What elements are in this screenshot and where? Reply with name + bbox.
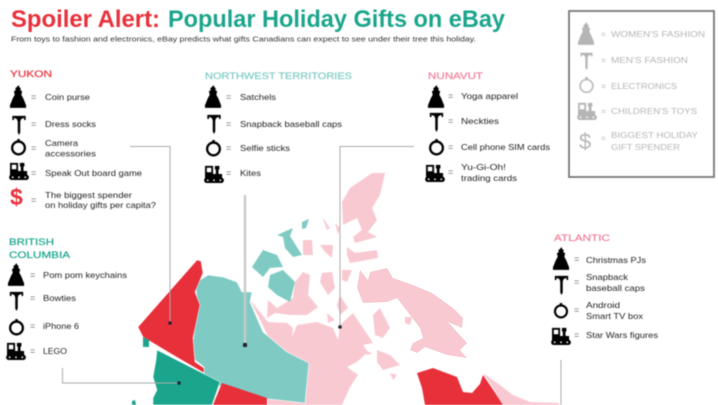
row: men's fashion: Dress socks — [45, 120, 96, 129]
region: Northwest Territories — [193, 219, 309, 403]
legend — [569, 11, 714, 177]
row: biggest spender: = — [31, 195, 36, 205]
row: electronics: = — [574, 305, 579, 315]
row: women's fashion: Pom pom keychains — [43, 271, 127, 280]
row: electronics: Camera — [45, 139, 79, 148]
legend: biggest spender: $ — [579, 129, 591, 154]
legend: biggest spender: BIGGEST HOLIDAY — [611, 130, 698, 140]
row: electronics: Android — [586, 301, 621, 310]
row: children's toys — [425, 163, 517, 183]
row: women's fashion: Yoga apparel — [461, 92, 518, 101]
row: electronics: = — [226, 143, 231, 153]
row: men's fashion — [207, 115, 342, 134]
row: biggest spender: The biggest spender — [45, 191, 132, 200]
row: children's toys: LEGO — [43, 347, 67, 356]
legend: men's fashion: MEN'S FASHION — [611, 55, 688, 65]
row: electronics: = — [31, 143, 36, 153]
row: children's toys: = — [574, 330, 579, 340]
legend: children's toys: = — [601, 106, 606, 116]
row: men's fashion: Snapback — [586, 273, 629, 282]
connector: Atlantic — [560, 360, 562, 405]
legend: children's toys: CHILDREN'S TOYS — [611, 106, 697, 116]
legend: women's fashion: WOMEN'S FASHION — [611, 29, 705, 39]
map of Canada — [132, 173, 559, 405]
row: women's fashion: Coin purse — [45, 93, 90, 102]
legend: electronics: ELECTRONICS — [611, 81, 677, 91]
row: men's fashion: Snapback baseball caps — [240, 120, 342, 129]
title — [11, 6, 506, 33]
row: children's toys — [204, 166, 261, 183]
row: biggest spender — [10, 184, 157, 210]
panel: Nunavut — [425, 71, 550, 183]
row: men's fashion: = — [31, 119, 36, 129]
panel: British Columbia — [6, 237, 127, 360]
row: men's fashion — [555, 273, 645, 295]
legend: electronics — [580, 77, 677, 92]
row: electronics — [12, 139, 96, 158]
panel: Atlantic — [551, 233, 658, 345]
row: women's fashion: = — [31, 92, 36, 102]
connector: Yukon — [130, 146, 172, 325]
legend: electronics: = — [601, 81, 606, 91]
row: electronics: = — [448, 142, 453, 152]
row: children's toys — [551, 328, 658, 345]
row: women's fashion: = — [30, 270, 35, 280]
row: electronics: Cell phone SIM cards — [461, 143, 550, 152]
row: men's fashion: = — [30, 293, 35, 303]
heading: Atlantic: ATLANTIC — [554, 233, 610, 244]
legend: men's fashion — [580, 53, 688, 70]
region: Yukon — [138, 260, 204, 373]
legend: biggest spender: = — [601, 133, 606, 143]
row: women's fashion: = — [226, 92, 231, 102]
row: children's toys — [6, 343, 67, 360]
row: children's toys: Kites — [240, 169, 261, 178]
row: women's fashion — [428, 85, 518, 108]
row: electronics — [207, 140, 290, 155]
legend frame — [569, 11, 714, 177]
region: Baffin Island — [357, 268, 467, 358]
row: electronics — [555, 301, 643, 321]
legend: men's fashion: = — [601, 55, 606, 65]
row: men's fashion: = — [226, 119, 231, 129]
heading: Nunavut: NUNAVUT — [428, 71, 483, 82]
row: men's fashion — [10, 292, 76, 311]
title: Spoiler Alert: — [11, 6, 160, 33]
title: Popular Holiday Gifts on eBay — [168, 6, 506, 33]
row: children's toys: Speak Out board game — [45, 169, 142, 178]
heading: Yukon: YUKON — [10, 69, 52, 80]
row: men's fashion: Bowties — [43, 294, 76, 303]
panel: Yukon — [9, 69, 157, 210]
row: women's fashion: Christmas PJs — [586, 256, 646, 265]
row: men's fashion: baseball caps — [586, 284, 645, 293]
row: men's fashion: = — [448, 116, 453, 126]
legend: children's toys — [577, 103, 697, 120]
row: electronics: Selfie sticks — [240, 144, 290, 153]
row: children's toys: = — [31, 168, 36, 178]
region: Alberta — [213, 383, 267, 405]
panel: Northwest Territories — [204, 71, 352, 183]
row: children's toys: Star Wars figures — [586, 331, 658, 340]
row: women's fashion — [10, 85, 90, 108]
row: women's fashion: = — [448, 91, 453, 101]
row: electronics: iPhone 6 — [43, 322, 79, 331]
legend: biggest spender: GIFT SPENDER — [611, 142, 680, 152]
heading: Northwest Territories: NORTHWEST TERRITORIES — [205, 71, 352, 82]
row: children's toys — [9, 163, 142, 180]
row: electronics: Smart TV box — [586, 312, 643, 321]
connector: Northwest Territories — [243, 195, 247, 347]
region: Saskatchewan — [268, 399, 309, 405]
region: British Columbia — [132, 337, 220, 405]
row: children's toys: trading cards — [461, 174, 517, 183]
connector: British Columbia — [62, 368, 181, 385]
row: men's fashion: Neckties — [461, 117, 499, 126]
row: children's toys: Yu-Gi-Oh! — [461, 163, 506, 172]
row: men's fashion — [12, 116, 96, 135]
legend: biggest spender — [579, 129, 698, 154]
row: electronics: accessories — [45, 150, 96, 158]
row: women's fashion: = — [574, 254, 579, 264]
row: electronics: = — [30, 321, 35, 331]
heading: British Columbia — [9, 237, 71, 261]
row: biggest spender: $ — [10, 184, 23, 210]
heading: British Columbia: COLUMBIA — [9, 250, 71, 261]
connector: Nunavut — [338, 146, 414, 329]
subtitle: From toys to fashion and electronics, eBay predicts what gifts Canadians can expect to see under their tree this holiday. — [11, 34, 476, 44]
row: women's fashion — [205, 85, 276, 108]
region: Quebec — [417, 368, 503, 405]
row: women's fashion: Satchels — [240, 93, 276, 102]
row: men's fashion — [430, 113, 499, 132]
region: Nunavut — [250, 173, 412, 405]
heading: British Columbia: BRITISH — [9, 237, 54, 248]
row: men's fashion: = — [574, 277, 579, 287]
row: children's toys: = — [448, 167, 453, 177]
legend: women's fashion — [578, 22, 705, 45]
row: women's fashion — [553, 247, 646, 270]
row: electronics — [430, 139, 550, 154]
row: women's fashion — [8, 263, 127, 286]
row: children's toys: = — [30, 346, 35, 356]
region: Atlantic — [483, 373, 559, 405]
row: biggest spender: on holiday gifts per capita? — [45, 201, 157, 210]
row: electronics — [10, 319, 79, 334]
row: children's toys: = — [226, 168, 231, 178]
legend: women's fashion: = — [601, 29, 606, 39]
